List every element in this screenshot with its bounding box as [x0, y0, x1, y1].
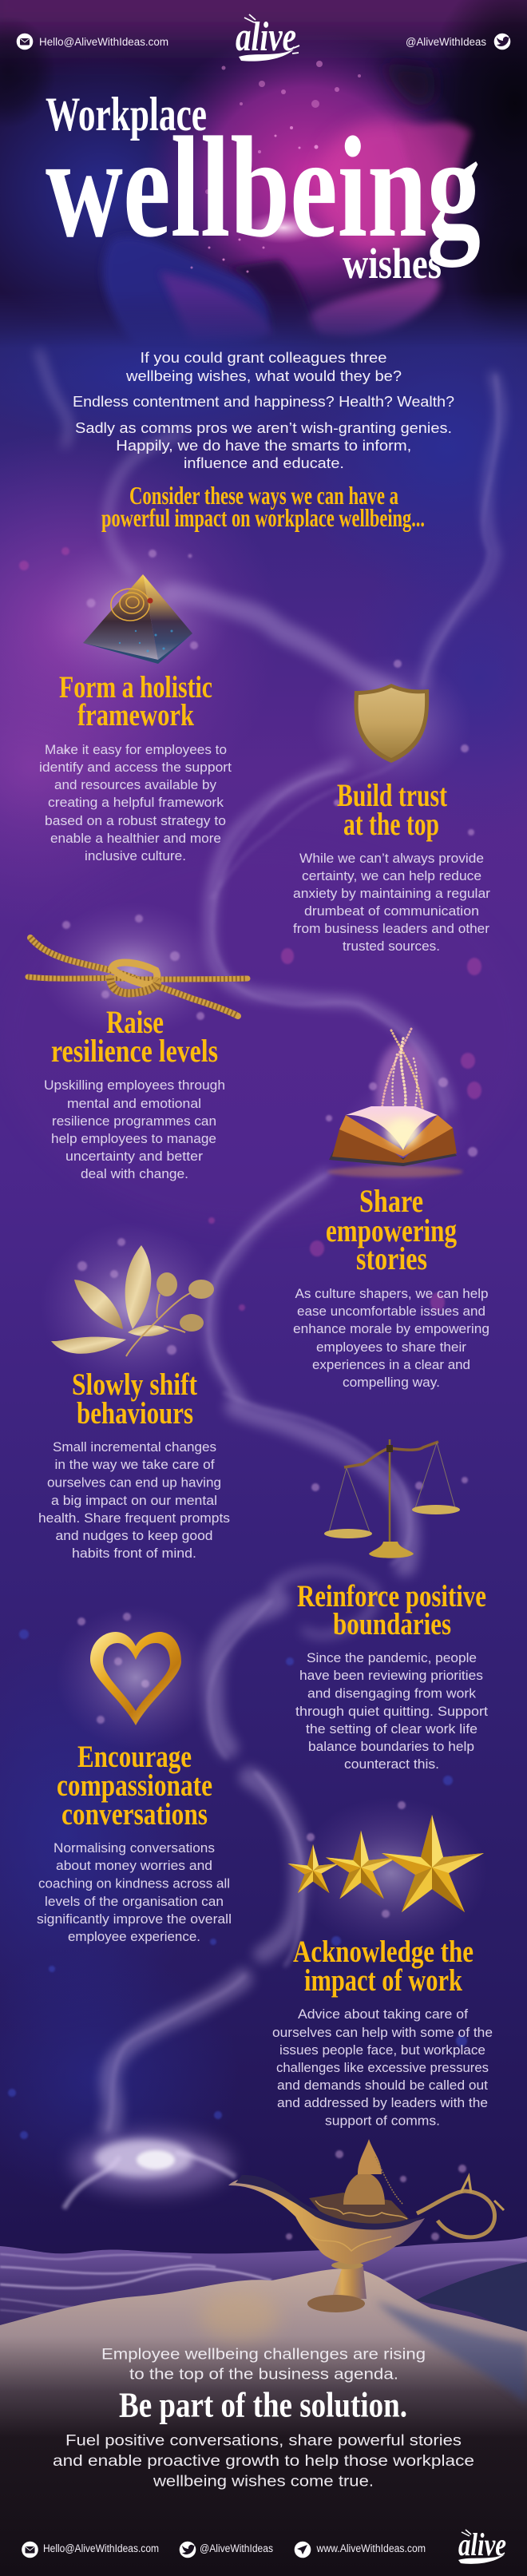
body text: anxiety by maintaining a regular	[293, 887, 491, 901]
icon: magic lamp	[228, 2139, 504, 2312]
heading	[57, 1740, 212, 1832]
icon: three gold stars	[287, 1815, 484, 1912]
panel: raise resilience levels	[28, 903, 248, 1181]
heading: stories	[356, 1240, 427, 1276]
heading	[337, 777, 448, 842]
body text: Since the pandemic, people	[307, 1651, 477, 1665]
panel: reinforce positive boundaries	[295, 1439, 488, 1772]
body text: certainty, we can help reduce	[302, 869, 481, 883]
heading	[293, 1935, 474, 1998]
closing call to action text: wellbeing wishes come true.	[153, 2474, 374, 2491]
intro text: Happily, we do have the smarts to inform,	[116, 437, 411, 454]
heading	[72, 1367, 197, 1431]
body text: have been reviewing priorities	[299, 1669, 483, 1683]
logo: alive footer: alive	[458, 2526, 506, 2562]
body text: mental and emotional	[67, 1097, 201, 1111]
heading	[51, 1004, 218, 1069]
footer: twitter: @AliveWithIdeas	[200, 2542, 273, 2554]
body text: health. Share frequent prompts	[38, 1511, 230, 1526]
body text: experiences in a clear and	[312, 1358, 470, 1372]
body text: creating a helpful framework	[48, 796, 224, 810]
body text	[44, 1078, 225, 1181]
icon: golden rope knot	[28, 938, 248, 1016]
footer: twitter	[180, 2542, 273, 2558]
body text: enhance morale by empowering	[293, 1322, 489, 1336]
body text	[295, 1651, 488, 1772]
footer: email: Hello@AliveWithIdeas.com	[43, 2542, 159, 2554]
body text	[39, 743, 232, 863]
intro text: Endless contentment and happiness? Health? Wealth?	[73, 393, 454, 410]
body text: challenges like excessive pressures	[276, 2061, 489, 2075]
heading: impact of work	[304, 1963, 462, 1998]
call to action heading: Be part of the solution.	[119, 2386, 407, 2425]
hero image: hands releasing magic	[0, 0, 527, 367]
body text: Upskilling employees through	[44, 1078, 225, 1093]
body text: balance boundaries to help	[308, 1740, 474, 1754]
body text: significantly improve the overall	[37, 1912, 232, 1927]
contact: email top left: Hello@AliveWithIdeas.com	[39, 36, 168, 48]
body text	[37, 1841, 232, 1944]
panel: encourage compassionate conversations	[37, 1606, 232, 1944]
body text: employees to share their	[316, 1340, 467, 1355]
panel: acknowledge the impact of work	[272, 1797, 493, 2129]
body text: and nudges to keep good	[56, 1529, 212, 1543]
smoke cloud from lamp	[64, 2133, 236, 2209]
gold lead-in heading	[101, 481, 425, 532]
heading: Form a holistic	[59, 670, 212, 705]
body text: identify and access the support	[39, 760, 232, 775]
intro text	[73, 349, 454, 471]
title: wishes	[343, 240, 442, 288]
footer: email	[22, 2542, 159, 2558]
closing call to action text	[53, 2433, 474, 2491]
body text: drumbeat of communication	[304, 904, 479, 919]
heading	[59, 670, 212, 732]
body text: ourselves can help with some of the	[272, 2026, 493, 2040]
body text: employee experience.	[68, 1930, 200, 1944]
body text: and addressed by leaders with the	[277, 2096, 488, 2110]
contact: twitter top right	[406, 34, 510, 50]
sand mound and foreground	[0, 2268, 527, 2576]
closing text	[101, 2347, 426, 2383]
body text: ourselves can end up having	[47, 1476, 221, 1490]
panel: share empowering stories	[293, 1029, 489, 1390]
body text: enable a healthier and more	[50, 832, 221, 846]
body text: counteract this.	[344, 1757, 439, 1772]
closing text: Employee wellbeing challenges are rising	[101, 2347, 426, 2363]
panel: form a holistic framework	[39, 535, 232, 863]
body text	[38, 1440, 230, 1561]
heading	[326, 1183, 457, 1276]
smoke trails	[40, 351, 499, 2129]
contact: email top left	[17, 34, 168, 50]
heading: Acknowledge the	[293, 1935, 474, 1969]
heading: empowering	[326, 1213, 457, 1248]
body text: and demands should be called out	[277, 2078, 488, 2093]
body text: a big impact on our mental	[51, 1494, 217, 1508]
heading: Slowly shift	[72, 1367, 197, 1402]
gold lead-in heading: Consider these ways we can have a	[129, 481, 398, 510]
intro text: influence and educate.	[184, 454, 344, 471]
body text: Small incremental changes	[53, 1440, 216, 1455]
logo: alive top: alive	[236, 14, 296, 60]
heading: behaviours	[77, 1396, 193, 1431]
icon: golden heart	[90, 1632, 181, 1725]
footer: website	[295, 2542, 426, 2558]
body text: ease uncomfortable issues and	[297, 1304, 485, 1319]
body text: habits front of mind.	[72, 1546, 196, 1561]
heading: boundaries	[333, 1607, 451, 1641]
body text: levels of the organisation can	[45, 1895, 224, 1909]
body text: through quiet quitting. Support	[295, 1705, 488, 1719]
icon: orgone pyramid	[83, 574, 192, 664]
body text: in the way we take care of	[54, 1458, 215, 1472]
body text	[272, 2007, 493, 2129]
heading: resilience levels	[51, 1033, 218, 1069]
icon: golden shield	[355, 684, 429, 763]
contact: twitter top right: @AliveWithIdeas	[406, 36, 486, 48]
footer: website: www.AliveWithIdeas.com	[316, 2542, 426, 2554]
body text	[293, 851, 491, 954]
panel: build trust at the top	[293, 655, 491, 954]
body text: Make it easy for employees to	[45, 743, 227, 757]
body text: and resources available by	[54, 778, 217, 792]
body text: coaching on kindness across all	[38, 1877, 230, 1891]
closing call to action text: Fuel positive conversations, share powerful stories	[65, 2433, 462, 2449]
body text: help employees to manage	[51, 1132, 216, 1146]
intro text: Sadly as comms pros we aren’t wish-granting genies.	[75, 419, 452, 436]
heading: Encourage	[77, 1740, 192, 1774]
sparkle particles over hero	[190, 61, 361, 273]
body text: support of comms.	[325, 2114, 440, 2129]
body text: As culture shapers, we can help	[295, 1287, 489, 1301]
heading: conversations	[61, 1797, 208, 1832]
title: Workplace	[46, 88, 207, 141]
icon: golden balance scales	[324, 1439, 460, 1558]
body text: Normalising conversations	[53, 1841, 215, 1856]
closing call to action text: and enable proactive growth to help those workplace	[53, 2453, 474, 2470]
background bokeh particles	[8, 547, 481, 2241]
desert dunes	[0, 2237, 527, 2396]
body text: Advice about taking care of	[298, 2007, 468, 2022]
panel: slowly shift behaviours	[38, 1222, 230, 1561]
heading: Build trust	[337, 777, 448, 813]
heading: Share	[359, 1183, 423, 1219]
heading: framework	[77, 698, 194, 732]
heading	[297, 1579, 486, 1641]
heading: compassionate	[57, 1768, 212, 1803]
heading: at the top	[343, 806, 439, 842]
body text: resilience programmes can	[52, 1114, 216, 1129]
body text: based on a robust strategy to	[45, 814, 226, 828]
body text: uncertainty and better	[65, 1149, 204, 1164]
body text: deal with change.	[81, 1167, 188, 1181]
body text: the setting of clear work life	[306, 1722, 477, 1737]
icon: golden leaves and buds	[51, 1245, 214, 1356]
body text: issues people face, but workplace	[279, 2043, 485, 2058]
body text	[293, 1287, 489, 1390]
body text: trusted sources.	[343, 939, 440, 954]
closing text: to the top of the business agenda.	[129, 2367, 398, 2383]
body text: inclusive culture.	[85, 849, 186, 863]
body text: While we can’t always provide	[299, 851, 484, 866]
body text: compelling way.	[343, 1375, 440, 1390]
body text: from business leaders and other	[293, 922, 490, 936]
intro text: If you could grant colleagues three	[141, 349, 386, 366]
intro text: wellbeing wishes, what would they be?	[125, 367, 402, 384]
heading: Raise	[106, 1004, 164, 1040]
icon: glowing open book	[327, 1029, 463, 1177]
body text: and disengaging from work	[307, 1687, 477, 1701]
body text: about money worries and	[56, 1859, 212, 1873]
